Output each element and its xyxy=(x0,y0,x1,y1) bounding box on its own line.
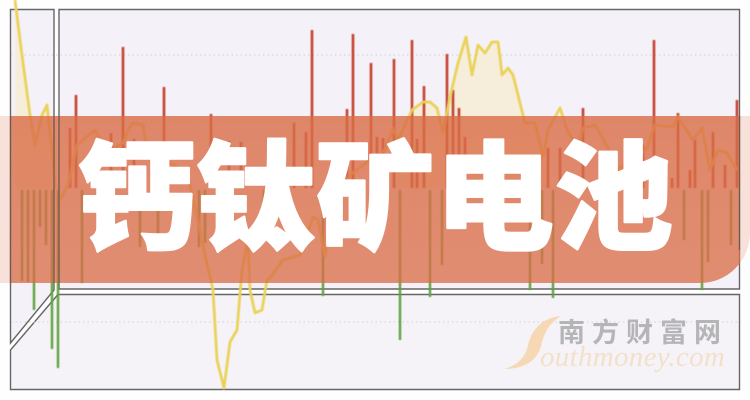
panel: main upper chart frame xyxy=(59,10,740,289)
chart: area under yellow line xyxy=(15,0,548,188)
title: 钙钛矿电池 xyxy=(77,134,675,266)
chart: red upper bars xyxy=(70,30,737,188)
watermark Chinese name: 南方财富网 xyxy=(558,317,728,348)
chart: green lower bars xyxy=(22,190,731,368)
watermark logo xyxy=(504,316,728,373)
watermark url: outhmoney.com xyxy=(540,341,725,373)
banner: saturated band xyxy=(10,116,740,283)
frame edges over banner xyxy=(10,116,740,283)
panel: lower chart frame xyxy=(10,294,740,390)
icon: swoosh S xyxy=(504,316,561,369)
banner: pale outer band xyxy=(0,116,750,283)
panel: left narrow chart frame xyxy=(10,10,54,343)
